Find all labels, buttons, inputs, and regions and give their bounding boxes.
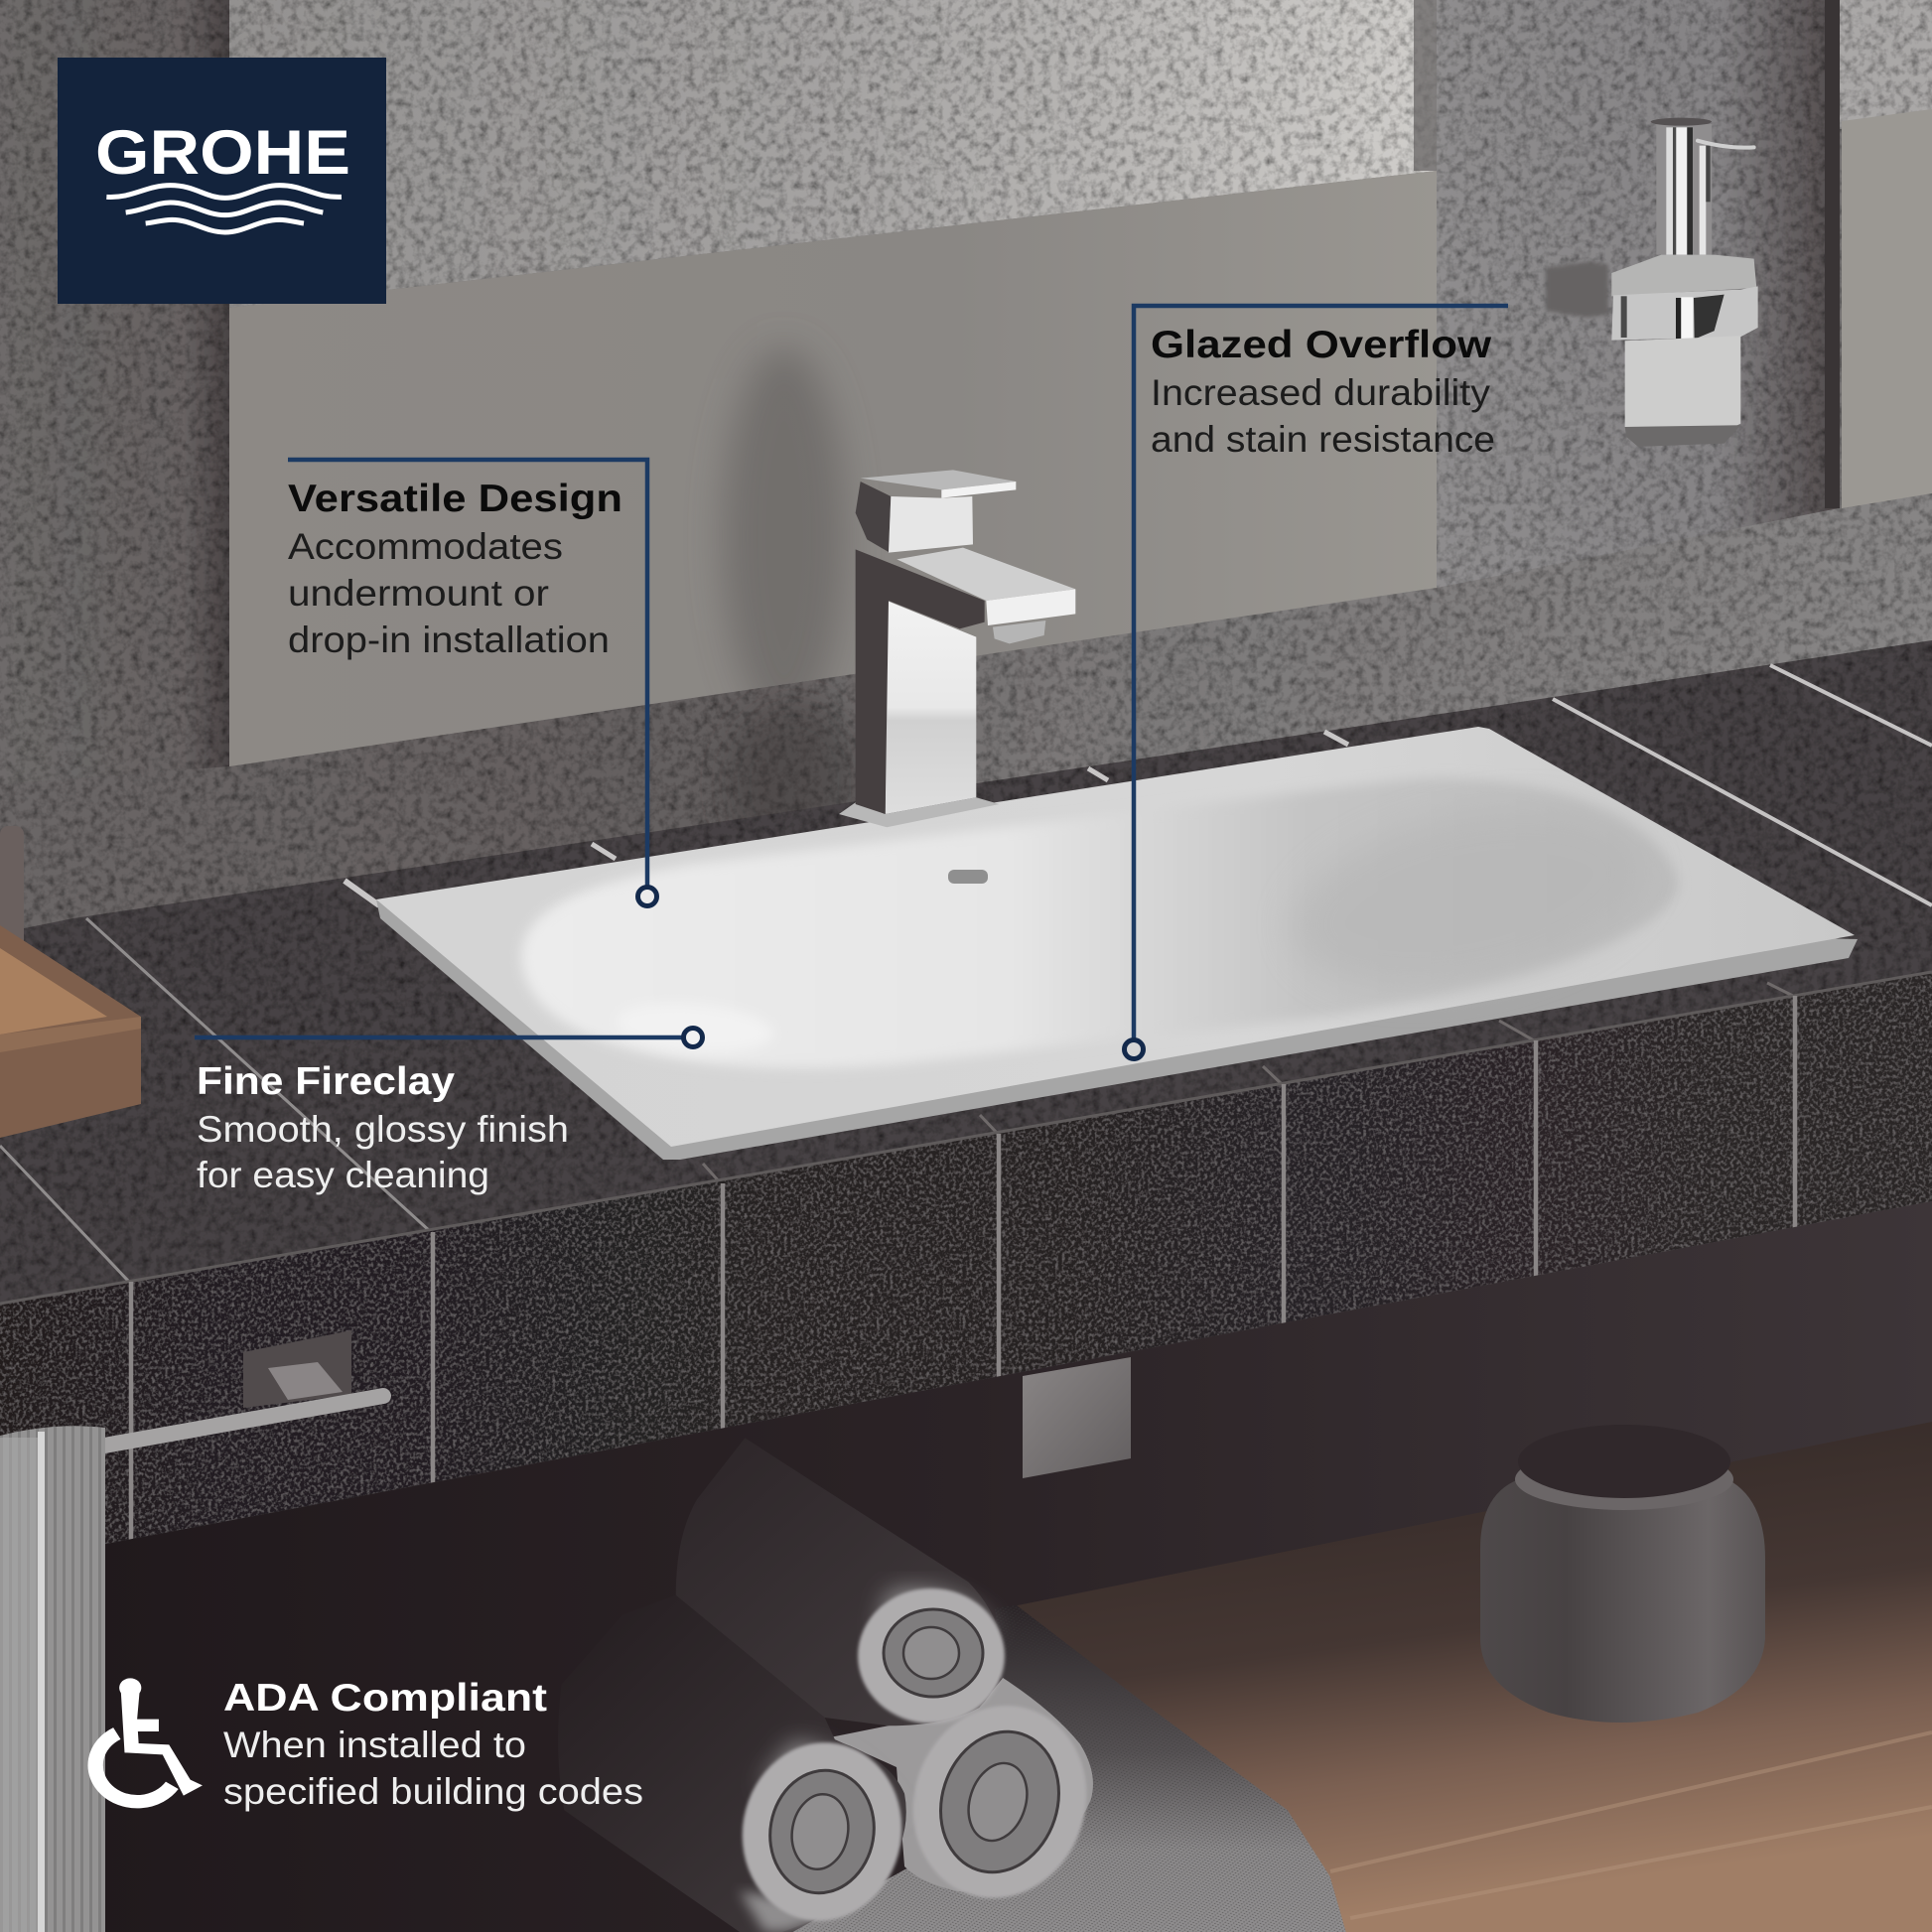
bottle (1625, 336, 1740, 432)
description: Increased durability (1151, 371, 1490, 413)
marker (1124, 1040, 1144, 1058)
wall mount (1546, 261, 1608, 318)
under counter wall (0, 1201, 1932, 1932)
tile seams (0, 665, 1932, 1282)
towel stack on woven cloth (558, 1438, 1346, 1932)
pump (1651, 118, 1754, 255)
wood floor (1013, 1422, 1932, 1932)
hanging towel (0, 1426, 105, 1932)
description (1151, 371, 1495, 460)
basin top (376, 727, 1855, 1147)
right towel (830, 1678, 1111, 1921)
right mirror (1825, 0, 1932, 508)
faucet dark side and spout (856, 549, 985, 814)
leader line (1134, 306, 1508, 1039)
leader line (195, 1035, 683, 1039)
marker (683, 1029, 703, 1046)
ceramic jar (1480, 1425, 1765, 1723)
wall background (0, 0, 1932, 1092)
description: drop-in installation (288, 619, 610, 660)
glass top (1611, 255, 1756, 296)
wooden tray with bottle (0, 826, 141, 1138)
basin shadow side (376, 899, 1858, 1160)
heading: ADA Compliant (223, 1677, 547, 1720)
description: for easy cleaning (197, 1154, 489, 1195)
bowl (521, 778, 1678, 1068)
faucet base (839, 797, 1000, 827)
callout: versatile design (288, 460, 657, 905)
heading: Versatile Design (288, 478, 622, 520)
lower left towel (558, 1595, 915, 1932)
towel bar (104, 1330, 383, 1446)
overflow logo mark (948, 870, 988, 884)
description (288, 525, 610, 660)
callout: ADA compliant (95, 1677, 643, 1812)
callout: fine fireclay (195, 1029, 703, 1195)
description (197, 1108, 569, 1195)
soap dispenser (1546, 118, 1758, 447)
description: When installed to (223, 1724, 526, 1765)
woven cloth (793, 1605, 1346, 1932)
leader line (288, 460, 647, 887)
counter top surface (0, 640, 1932, 1304)
aerator (993, 621, 1045, 643)
top towel (676, 1438, 1005, 1725)
logo wordmark: GROHE (95, 118, 350, 188)
description: specified building codes (223, 1770, 643, 1812)
chrome ring (1611, 286, 1758, 342)
spout top (897, 548, 1075, 601)
description: Smooth, glossy finish (197, 1108, 569, 1150)
description: Accommodates (288, 525, 563, 567)
description (223, 1724, 643, 1812)
description: and stain resistance (1151, 418, 1495, 460)
description: undermount or (288, 572, 549, 614)
logo (58, 58, 386, 304)
handle (856, 470, 1016, 553)
main mirror with concrete reflection (229, 0, 1437, 766)
spout front (986, 589, 1075, 625)
faucet chrome body (886, 601, 976, 814)
logo waves (106, 186, 342, 232)
wall plate under counter (1023, 1357, 1131, 1478)
heading: Glazed Overflow (1151, 324, 1492, 366)
callout: glazed overflow (1124, 306, 1508, 1058)
marker (637, 888, 657, 905)
heading: Fine Fireclay (197, 1060, 455, 1103)
faucet (839, 470, 1075, 827)
icon: wheelchair (95, 1678, 203, 1802)
counter front face with tiles (0, 972, 1932, 1564)
wash basin (376, 727, 1858, 1160)
